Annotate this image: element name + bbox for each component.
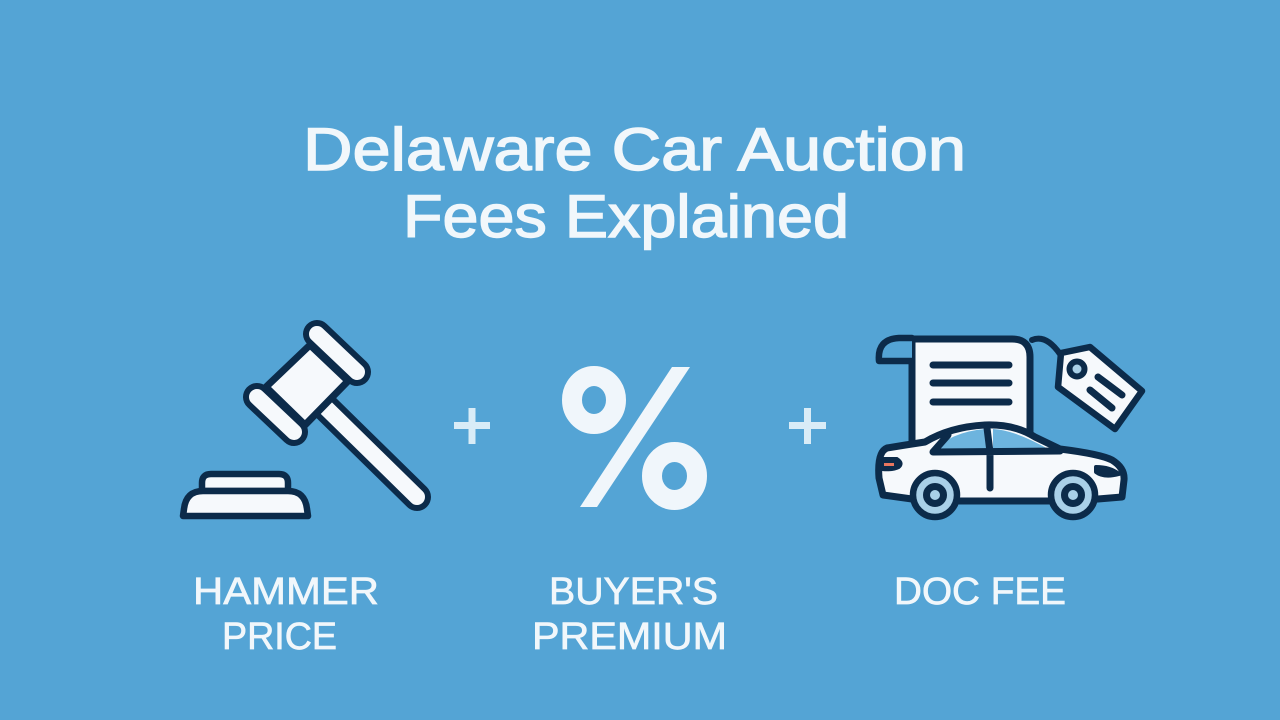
- title: Delaware Car Auction: [303, 116, 966, 183]
- car: [879, 425, 1124, 517]
- title: Fees Explained: [403, 183, 849, 250]
- icon: percent: [572, 367, 697, 507]
- gavel head: [266, 345, 348, 425]
- label: hammer price: HAMMER: [193, 571, 379, 613]
- label: buyer's premium: BUYER'S: [549, 571, 718, 613]
- price tag: [1032, 339, 1142, 429]
- label: doc fee: DOC FEE: [894, 571, 1066, 613]
- label: hammer price: [193, 571, 379, 658]
- icon: document, car and price tag: [879, 338, 1142, 517]
- plus sign 1: [454, 408, 490, 444]
- plus sign 2: [789, 408, 826, 444]
- gavel lower cap: [257, 397, 294, 432]
- document: [879, 338, 1030, 445]
- icon: gavel: [183, 334, 417, 516]
- gavel base: [183, 474, 308, 516]
- label: hammer price: PRICE: [222, 616, 337, 658]
- gavel handle: [315, 397, 417, 497]
- gavel upper cap: [317, 334, 357, 372]
- label: buyer's premium: PREMIUM: [532, 616, 727, 658]
- title: [303, 116, 966, 250]
- label: buyer's premium: [532, 571, 727, 658]
